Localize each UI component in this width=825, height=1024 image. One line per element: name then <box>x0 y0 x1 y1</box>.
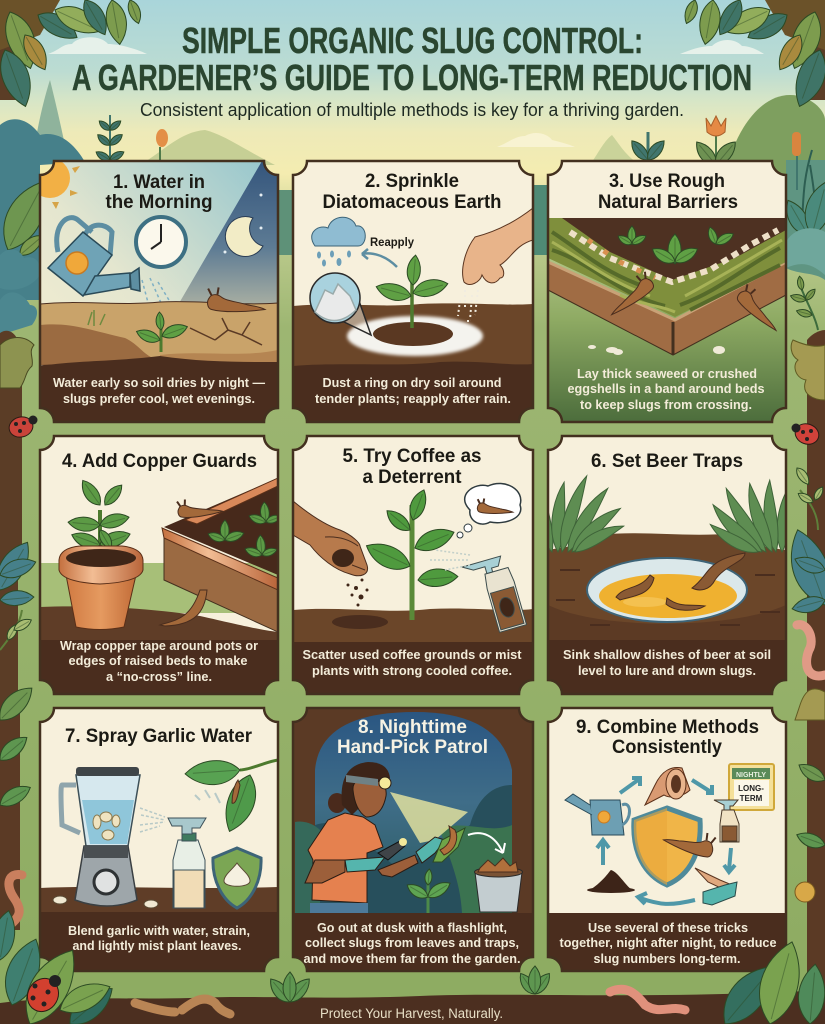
panel 8: nighttime patrol <box>293 708 533 971</box>
caption: a “no-cross” line. <box>106 670 212 684</box>
caption: tender plants; reapply after rain. <box>315 392 511 406</box>
caption: edges of raised beds to make <box>68 654 248 668</box>
person <box>305 762 445 913</box>
icon: hand with grounds <box>293 501 368 576</box>
heading <box>337 717 488 758</box>
icon: hand <box>463 208 533 284</box>
icon: calendar: NIGHTLY <box>736 772 766 779</box>
caption: to keep slugs from crossing. <box>580 398 752 412</box>
icon: slug <box>208 287 265 312</box>
icon: calendar <box>729 764 774 810</box>
caption <box>53 376 265 406</box>
panel 9: combine methods <box>548 708 786 971</box>
panel frame <box>40 161 278 422</box>
caption <box>568 367 765 412</box>
worm left <box>9 875 22 925</box>
heading: 7. Spray Garlic Water <box>65 726 253 747</box>
soil and seaweed <box>548 218 786 317</box>
flashlight beam <box>390 792 468 843</box>
caption: Use several of these tricks <box>588 921 748 935</box>
grass right <box>706 480 796 559</box>
icon: sun <box>40 162 80 209</box>
heading <box>322 171 502 213</box>
caption <box>60 639 258 684</box>
icon: plant <box>404 869 453 913</box>
panel 6: beer traps <box>531 436 796 694</box>
slugs in beer <box>616 553 745 610</box>
subtitle: Consistent application of multiple methods is key for a thriving garden. <box>140 100 684 120</box>
bottom worms <box>135 999 230 1014</box>
caption: Water early so soil dries by night — <box>53 376 265 390</box>
caption: Sink shallow dishes of beer at soil <box>563 648 771 662</box>
caption: together, night after night, to reduce <box>560 936 777 950</box>
slugs <box>160 494 223 626</box>
spray mist <box>140 808 165 832</box>
grass left <box>531 473 625 555</box>
icon: copper tape <box>645 768 690 805</box>
icon: gloved hand <box>695 868 737 905</box>
ladybug right <box>792 420 822 448</box>
heading: 8. Nighttime <box>358 717 467 738</box>
label: reapply: Reapply <box>370 235 414 249</box>
caption: level to lure and drown slugs. <box>578 664 756 678</box>
magnifier <box>310 273 371 335</box>
top-right leaves <box>682 0 825 111</box>
diatomaceous ring <box>347 316 483 356</box>
bottom-right worm <box>610 989 685 1010</box>
caption: slugs prefer cool, wet evenings. <box>63 392 255 406</box>
caption band <box>293 362 533 422</box>
heading: 2. Sprinkle <box>365 171 459 192</box>
caption: Wrap copper tape around pots or <box>60 639 258 653</box>
icon: slug shield <box>634 808 716 885</box>
icon: soil pile <box>587 870 635 893</box>
caption <box>304 921 520 966</box>
icon: seedling <box>135 312 189 352</box>
caption: and lightly mist plant leaves. <box>72 939 242 953</box>
heading <box>598 171 738 213</box>
stars <box>224 194 262 254</box>
icon: calendar: TERM <box>740 794 763 803</box>
caption: Dust a ring on dry soil around <box>322 376 502 390</box>
icon: seedling <box>374 255 450 328</box>
top-left leaves <box>0 0 144 111</box>
heading <box>342 446 482 488</box>
caption band <box>40 356 278 422</box>
icon: shield with garlic <box>213 848 261 908</box>
worm right <box>797 625 825 676</box>
caption <box>560 921 777 966</box>
heading: 1. Water in <box>113 172 205 193</box>
footer tagline: Protect Your Harvest, Naturally. <box>320 1006 503 1021</box>
caption: Lay thick seaweed or crushed <box>577 367 757 381</box>
caption <box>563 648 771 678</box>
ladybug left <box>7 414 38 440</box>
soil furrows <box>556 570 780 625</box>
thought bubble with slug <box>457 483 521 538</box>
cycle arrows <box>597 778 735 904</box>
garlic cloves <box>53 896 158 908</box>
bottom-left foliage and ladybug <box>0 909 119 1024</box>
caption: slug numbers long-term. <box>594 952 740 966</box>
background bushes <box>315 785 512 913</box>
heading: the Morning <box>106 192 212 213</box>
title <box>72 20 752 98</box>
caption: eggshells in a band around beds <box>568 382 765 396</box>
icon: potted plant <box>59 477 143 630</box>
heading: 6. Set Beer Traps <box>591 451 743 472</box>
icon: moon <box>225 216 263 256</box>
sprinkled powder <box>457 304 478 322</box>
icon: blender <box>61 767 140 906</box>
title: SIMPLE ORGANIC SLUG CONTROL: <box>182 20 643 61</box>
panel frame <box>293 161 533 422</box>
icon: beer dish <box>587 558 747 622</box>
icon: calendar: LONG- <box>738 784 764 793</box>
eggshell bits <box>588 345 725 355</box>
panel 5: coffee deterrent <box>293 436 533 694</box>
spray mist <box>430 550 470 570</box>
icon: watering can <box>565 794 630 835</box>
heading: 9. Combine Methods <box>576 717 759 738</box>
icon: watering can <box>48 218 140 296</box>
icon: plant <box>362 487 459 620</box>
plants on bottom edge <box>265 966 553 1006</box>
panel frame <box>548 708 786 971</box>
icon: clock <box>136 217 186 267</box>
caption <box>302 648 522 678</box>
caption band <box>293 913 533 971</box>
heading <box>106 172 212 213</box>
right side foliage <box>780 150 825 902</box>
heading: Consistently <box>612 737 722 758</box>
icon: spray bottle <box>462 554 526 637</box>
heading: 5. Try Coffee as <box>342 446 482 467</box>
panel 3: rough natural barriers <box>548 161 788 422</box>
mist on leaf <box>195 790 220 803</box>
panel frame <box>548 161 786 422</box>
arrow: reapply <box>362 249 397 267</box>
panel frame <box>548 436 786 694</box>
caption: Go out at dusk with a flashlight, <box>317 921 507 935</box>
icon: bucket <box>474 858 522 912</box>
icon: leaf with slug <box>184 759 278 836</box>
icon: spray bottle <box>714 800 739 842</box>
icon: ladybug <box>22 973 64 1017</box>
icon: spray bottle <box>168 818 206 908</box>
left side foliage <box>0 173 59 811</box>
caption: Scatter used coffee grounds or mist <box>302 648 522 662</box>
bottom-right foliage <box>712 937 825 1024</box>
slugs <box>610 272 778 332</box>
heading <box>576 717 759 758</box>
caption: Blend garlic with water, strain, <box>68 924 250 938</box>
bed plants <box>616 226 735 267</box>
panel 4: copper guards <box>40 436 282 694</box>
soil <box>294 303 532 366</box>
heading: 4. Add Copper Guards <box>62 451 257 472</box>
raised bed with copper <box>162 478 282 632</box>
water spray <box>141 278 170 302</box>
heading: Diatomaceous Earth <box>322 192 502 213</box>
coffee ground dots <box>346 578 368 606</box>
heading: Hand-Pick Patrol <box>337 737 488 758</box>
icon: rain cloud <box>312 217 365 266</box>
slug on leaf <box>433 826 465 862</box>
raised bed wood <box>548 262 786 355</box>
caption <box>315 376 511 406</box>
panel 2: diatomaceous earth <box>293 161 533 422</box>
heading: Natural Barriers <box>598 192 738 213</box>
panel frame <box>40 436 278 694</box>
panel frame <box>40 708 278 971</box>
crushed eggshells <box>570 230 778 282</box>
heading: a Deterrent <box>362 467 462 488</box>
caption: plants with strong cooled coffee. <box>312 664 512 678</box>
dry soil <box>40 302 278 365</box>
plants behind title <box>94 115 801 190</box>
caption: and move them far from the garden. <box>304 952 520 966</box>
caption <box>68 924 250 953</box>
panel 7: garlic water <box>40 708 278 971</box>
panel frame <box>293 436 533 694</box>
caption: collect slugs from leaves and traps, <box>305 936 519 950</box>
heading: 3. Use Rough <box>609 171 725 192</box>
arrow to bucket <box>468 833 505 853</box>
panel frame <box>293 708 533 971</box>
panel 1: water in the morning <box>29 158 278 422</box>
